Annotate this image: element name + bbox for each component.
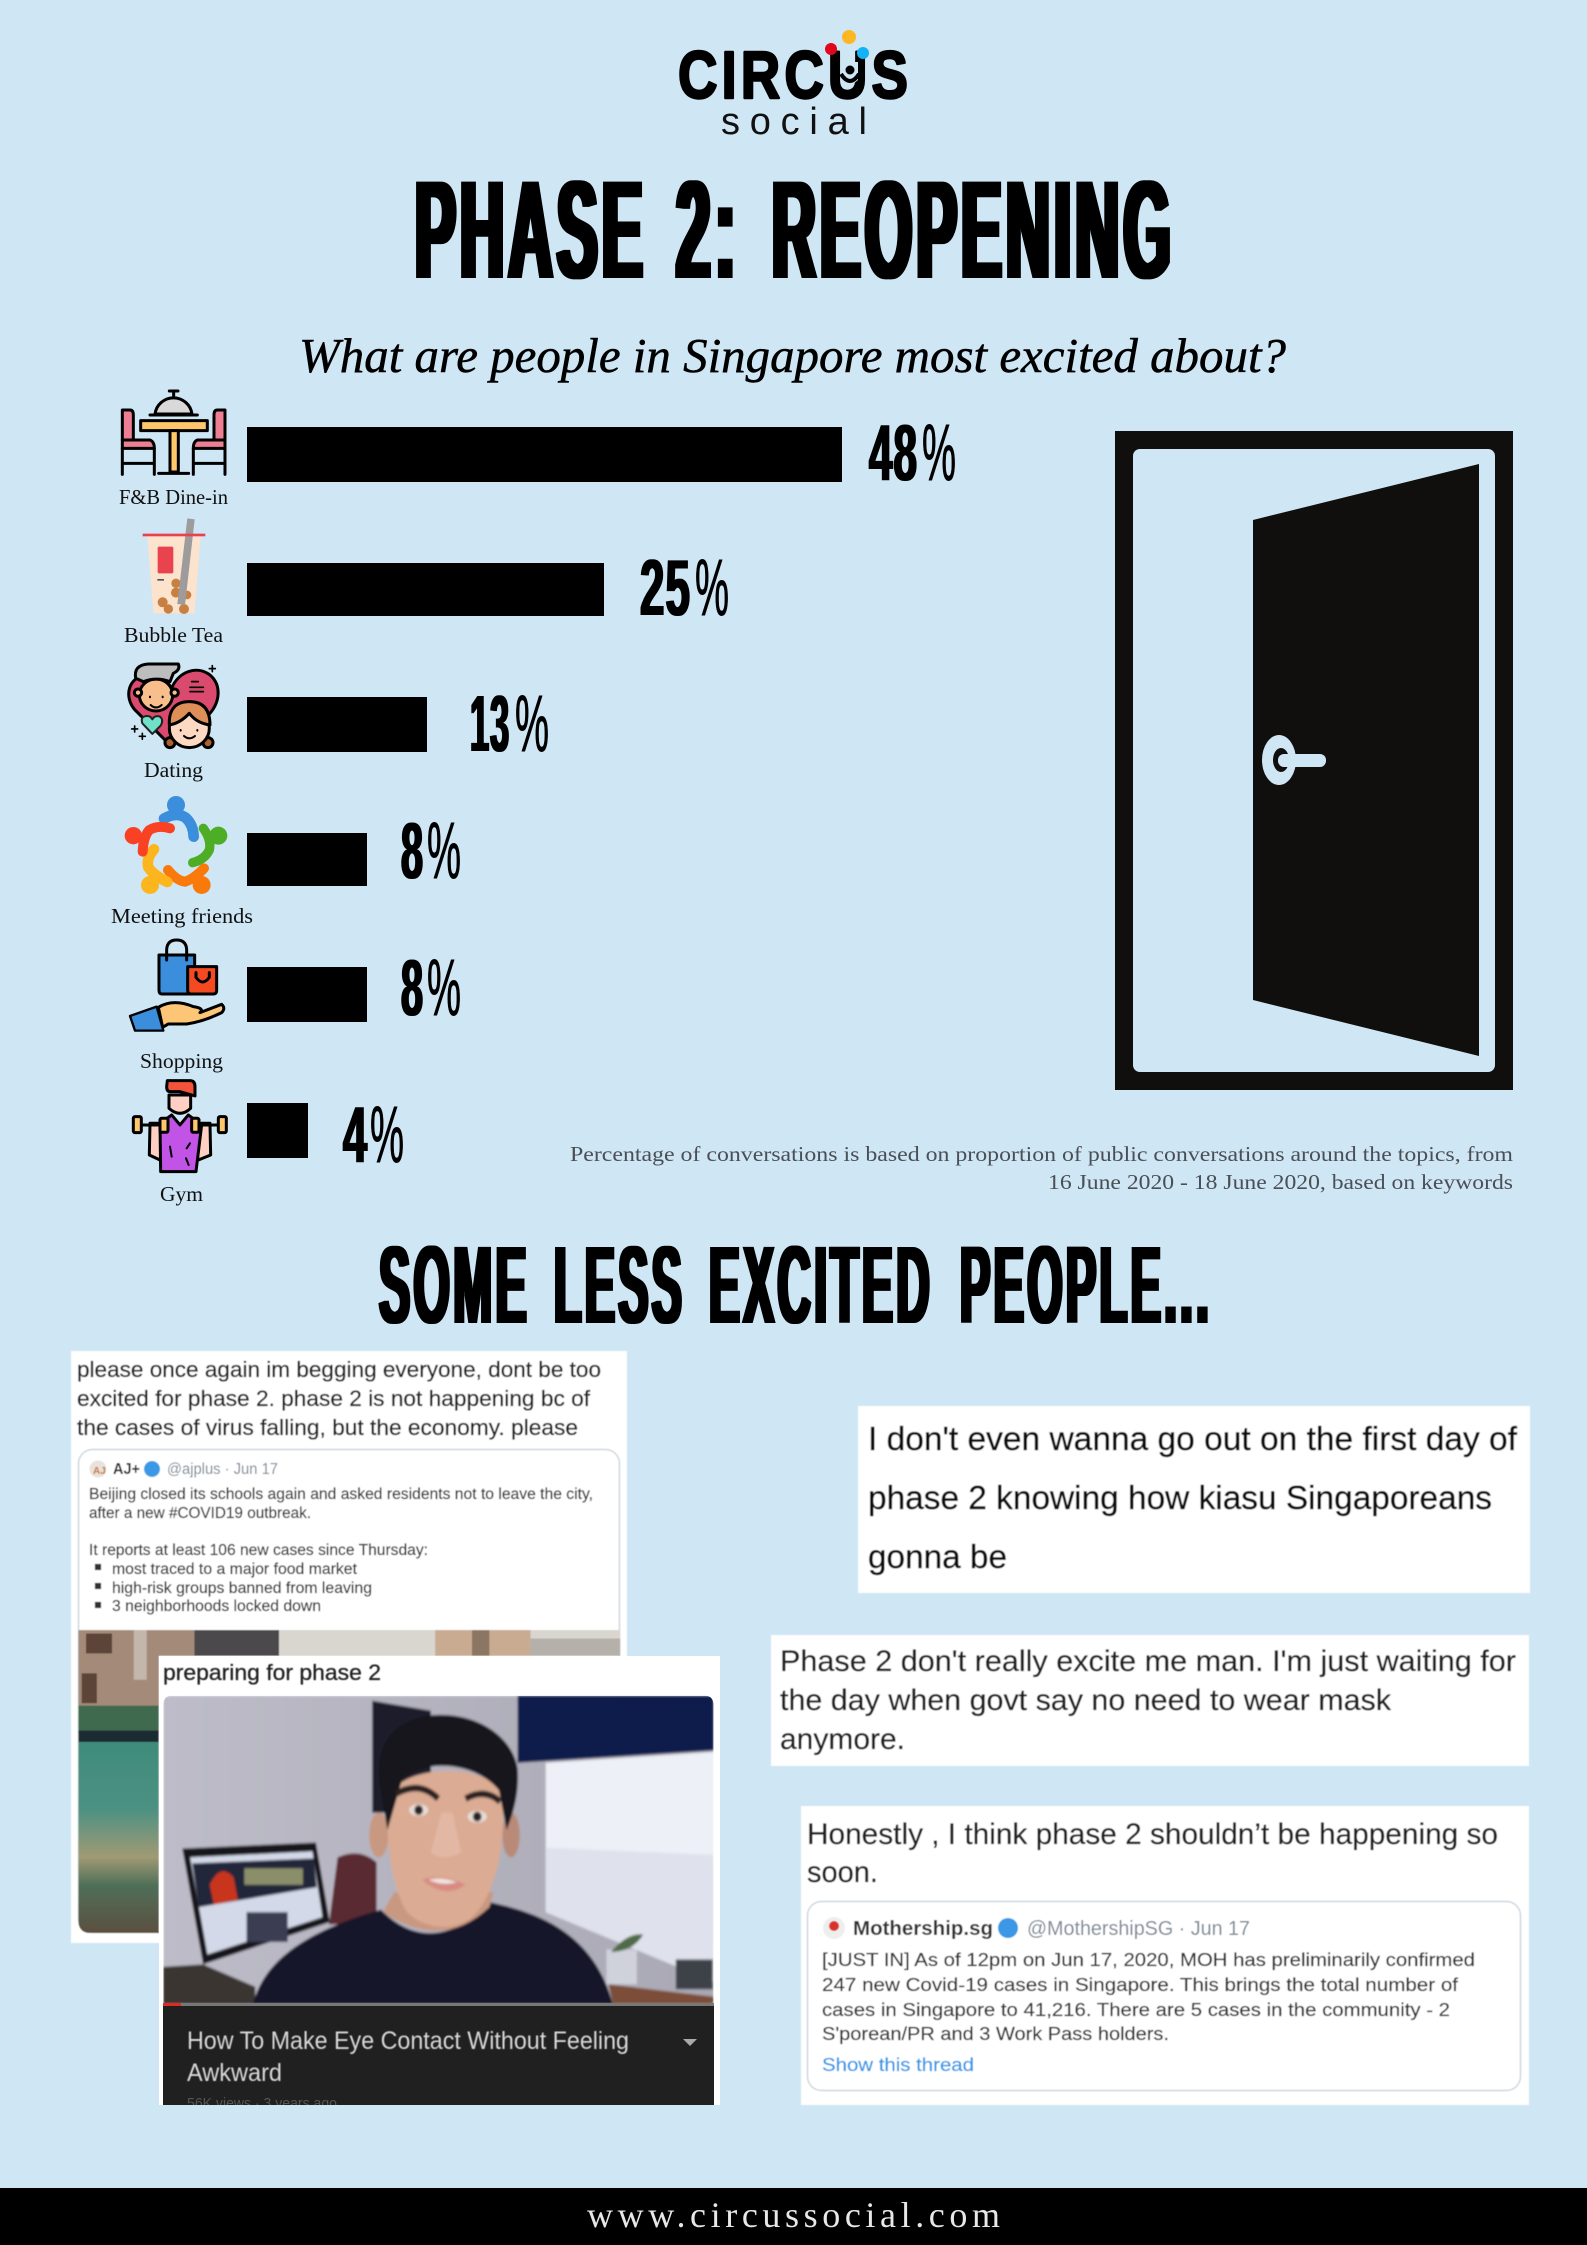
title: PHASE	[415, 151, 647, 308]
quoted tweet card	[78, 1450, 620, 1932]
value: 8% shopping: 8	[401, 943, 423, 1032]
tweet text: the cases of virus falling, but the economy. please	[77, 1415, 578, 1440]
logo: Circus Social	[678, 30, 912, 143]
icon: shopping	[130, 940, 224, 1031]
quoted tweet body: high-risk groups banned from leaving	[112, 1580, 372, 1597]
icon: bubble tea	[143, 518, 205, 614]
row: Dating	[129, 664, 549, 782]
footer bar	[0, 2188, 1587, 2245]
label: F&B Dine-in: F&B Dine-in	[119, 485, 228, 509]
bar: 4%	[247, 1103, 308, 1158]
video title	[187, 2027, 629, 2087]
quoted tweet body: most traced to a major food market	[112, 1561, 358, 1578]
value: 13%: 13	[470, 679, 510, 768]
logo juggling balls	[825, 30, 869, 59]
section heading: SOME	[379, 1224, 530, 1347]
tweet text	[807, 1818, 1498, 1889]
quoted tweet photo	[78, 1630, 620, 1934]
video progress bar	[163, 2003, 714, 2006]
icon: open door	[1115, 431, 1513, 1090]
footnote	[570, 1142, 1513, 1194]
text: %	[922, 408, 956, 497]
bar: 13%	[247, 697, 427, 752]
quoted tweet body: Show this thread	[822, 2054, 974, 2075]
quoted tweet body: S'porean/PR and 3 Work Pass holders.	[822, 2023, 1169, 2044]
row: Shopping	[130, 940, 461, 1073]
value: 4%: 4	[343, 1090, 367, 1179]
tweet text: Honestly , I think phase 2 shouldn’t be happening so	[807, 1818, 1498, 1851]
panel: kiasu tweet: gonna be	[868, 1538, 1007, 1575]
bar chart: topics: %	[427, 806, 461, 895]
tweet text: soon.	[807, 1856, 878, 1889]
panel: preparing for phase 2 video	[159, 1656, 720, 2112]
label: Gym: Gym	[160, 1182, 203, 1206]
panel: kiasu tweet	[858, 1406, 1530, 1593]
panel: mask tweet	[771, 1635, 1529, 1766]
logo smile mark	[841, 62, 859, 84]
panel: mask tweet: the day when govt say no need to wear mask	[780, 1684, 1392, 1717]
quoted tweet card	[808, 1902, 1520, 2090]
quoted tweet body	[89, 1486, 593, 1615]
panel: tweet about Beijing outbreak	[71, 1351, 627, 1943]
video dropdown caret	[683, 2039, 697, 2046]
quoted tweet body	[822, 1949, 1475, 2075]
quoted tweet header: AJ	[93, 1466, 106, 1477]
footnote: Percentage of conversations is based on proportion of public conversations around the topics, from	[570, 1142, 1513, 1166]
value: 25%: 25	[640, 543, 691, 632]
icon: dining table	[122, 391, 225, 474]
video title: Awkward	[187, 2059, 282, 2087]
icon: meeting friends	[125, 796, 227, 894]
bar chart: topics	[111, 391, 956, 1206]
quoted tweet header: @ajplus · Jun 17	[167, 1461, 278, 1478]
row: Bubble Tea	[124, 518, 729, 647]
section heading	[379, 1224, 1212, 1347]
quoted tweet body: 3 neighborhoods locked down	[112, 1598, 321, 1615]
subtitle question: What are people in Singapore most excited about?	[299, 328, 1286, 383]
bar chart: topics: %	[370, 1090, 404, 1179]
row: F&B Dine-in	[119, 391, 956, 509]
quoted tweet body: [JUST IN] As of 12pm on Jun 17, 2020, MOH has preliminarily confirmed	[822, 1949, 1475, 1970]
footer website: www.circussocial.com	[587, 2195, 1000, 2235]
panel: mask tweet: anymore.	[780, 1723, 905, 1756]
label: Shopping: Shopping	[140, 1049, 224, 1073]
bar chart: topics: %	[427, 943, 461, 1032]
text: PEOPLE...	[960, 1224, 1212, 1347]
label: Bubble Tea: Bubble Tea	[124, 623, 224, 647]
icon: gym	[133, 1081, 226, 1172]
label: Dating: Dating	[144, 758, 204, 782]
footnote: 16 June 2020 - 18 June 2020, based on keywords	[1048, 1170, 1513, 1194]
panel: kiasu tweet: I don't even wanna go out on the first day of	[868, 1420, 1518, 1457]
bar: 8% shopping	[247, 967, 367, 1022]
video title: How To Make Eye Contact Without Feeling	[187, 2027, 629, 2055]
quoted tweet body: cases in Singapore to 41,216. There are 5 cases in the community - 2	[822, 1999, 1450, 2020]
bar chart: topics: %	[515, 679, 549, 768]
video info bar	[163, 2006, 714, 2105]
tweet text: please once again im begging everyone, dont be too	[77, 1357, 601, 1382]
value: 48%: 48	[869, 408, 918, 497]
tweet text	[77, 1357, 601, 1440]
row: Meeting friends	[111, 796, 461, 928]
quoted tweet header: AJ+	[113, 1461, 140, 1478]
quoted tweet header	[823, 1917, 1250, 1940]
label: Meeting friends: Meeting friends	[111, 904, 253, 928]
panel: kiasu tweet: phase 2 knowing how kiasu Singaporeans	[868, 1479, 1492, 1516]
title: 2:	[676, 151, 740, 308]
bar: 8% friends	[247, 833, 367, 886]
row: Gym	[133, 1081, 404, 1206]
video still: man talking	[163, 1696, 714, 2004]
quoted tweet body: 247 new Covid-19 cases in Singapore. This brings the total number of	[822, 1974, 1459, 1995]
quoted tweet header: Mothership.sg	[853, 1918, 993, 1940]
quoted tweet body: Beijing closed its schools again and asked residents not to leave the city,	[89, 1486, 593, 1503]
quoted tweet body: after a new #COVID19 outbreak.	[89, 1505, 311, 1522]
logo subtitle: social	[721, 101, 867, 143]
section heading: LESS	[554, 1224, 685, 1347]
video caption: preparing for phase 2	[163, 1660, 381, 1685]
quoted tweet header	[90, 1460, 278, 1478]
value: 8% friends: 8	[401, 806, 423, 895]
quoted tweet header: @MothershipSG · Jun 17	[1027, 1918, 1250, 1940]
quoted tweet body: It reports at least 106 new cases since Thursday:	[89, 1542, 428, 1559]
panel: mask tweet: Phase 2 don't really excite me man. I'm just waiting for	[780, 1645, 1516, 1678]
video metadata: 56K views · 3 years ago	[187, 2095, 337, 2112]
panel: Mothership tweet	[801, 1806, 1529, 2105]
tweet text: excited for phase 2. phase 2 is not happening bc of	[77, 1386, 591, 1411]
section heading: EXCITED	[709, 1224, 933, 1347]
bar: 25%	[247, 563, 604, 616]
logo wordmark: CIRCUS	[678, 38, 912, 113]
bar: 48%	[247, 427, 842, 482]
bar chart: topics: %	[695, 543, 729, 632]
icon: dating couple	[129, 664, 218, 748]
